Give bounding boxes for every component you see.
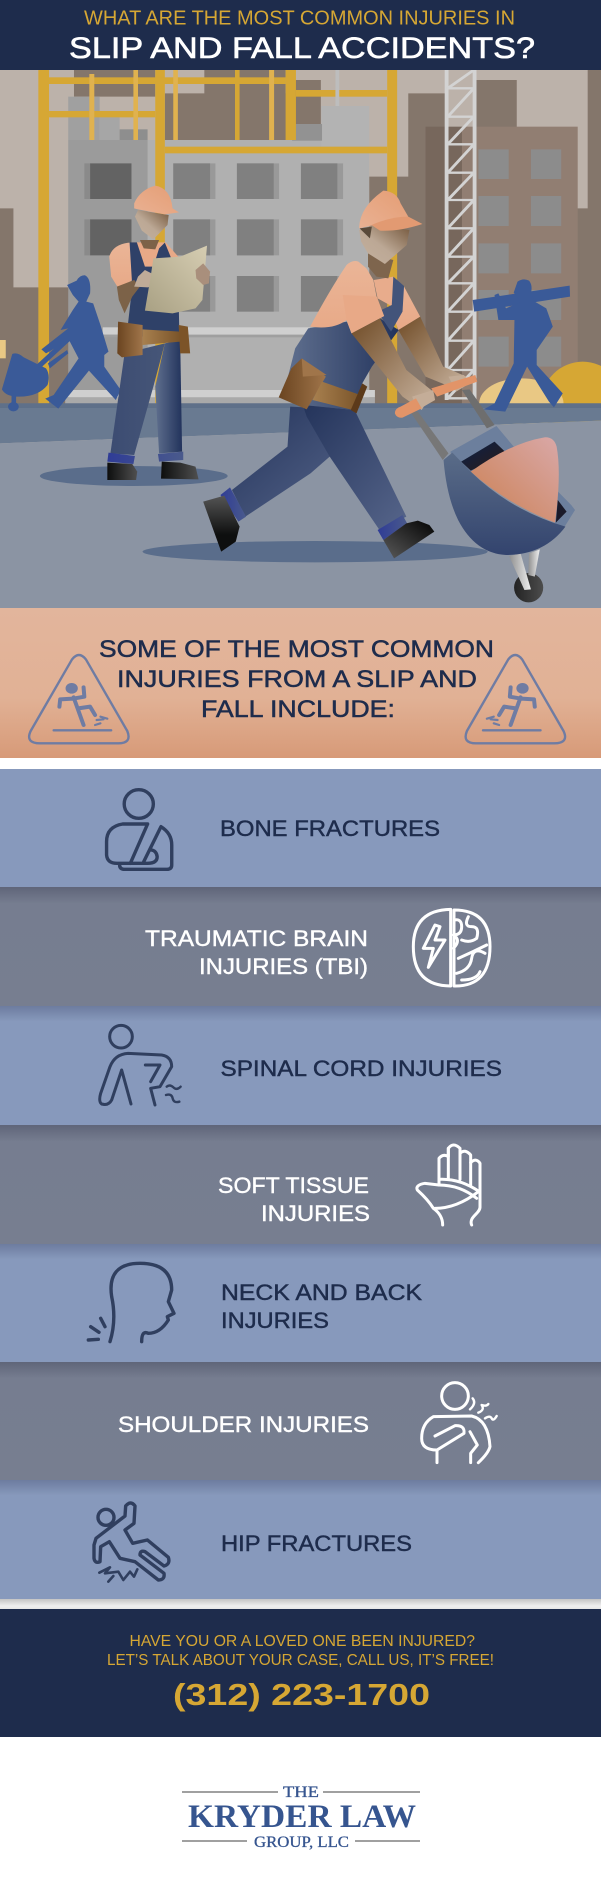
icon: person falling on hip <box>94 1503 169 1582</box>
label: INJURIES <box>221 1308 329 1333</box>
ground <box>0 403 601 610</box>
crane tower <box>337 70 475 400</box>
blue walker with wheelbarrow <box>2 275 121 411</box>
panel: shoulder injuries <box>0 1362 601 1480</box>
panel: traumatic brain injuries <box>0 887 601 1006</box>
blue worker carrying beam <box>473 279 570 412</box>
icon: hand <box>417 1145 480 1225</box>
label: SPINAL CORD INJURIES <box>220 1056 502 1081</box>
panel: neck and back injuries <box>0 1244 601 1362</box>
icon: wet floor sign right <box>466 655 565 743</box>
label: SOFT TISSUE <box>218 1173 369 1198</box>
shadow <box>143 541 488 562</box>
heading line 1: WHAT ARE THE MOST COMMON INJURIES IN <box>84 8 515 30</box>
logo: The Kryder Law Group: GROUP, LLC <box>254 1834 349 1851</box>
label: HIP FRACTURES <box>221 1531 412 1556</box>
call to action text: HAVE YOU OR A LOVED ONE BEEN INJURED? <box>130 1633 475 1650</box>
logo: The Kryder Law Group <box>182 1784 420 1851</box>
label: TRAUMATIC BRAIN <box>145 926 368 951</box>
label: NECK AND BACK <box>221 1280 422 1305</box>
sand piles <box>0 340 601 424</box>
call to action text: LET’S TALK ABOUT YOUR CASE, CALL US, IT’S FREE! <box>107 1652 494 1669</box>
divider strip <box>0 1599 601 1609</box>
standing worker <box>40 186 228 486</box>
yellow scaffolding <box>38 70 397 403</box>
panel: spinal cord injuries <box>0 1006 601 1125</box>
intro text: INJURIES FROM A SLIP AND <box>117 666 477 693</box>
label <box>218 1173 370 1226</box>
label: INJURIES <box>261 1201 370 1226</box>
label: INJURIES (TBI) <box>199 954 368 979</box>
icon: shoulder pain <box>422 1383 497 1463</box>
gray building under construction <box>65 97 375 404</box>
panel: soft tissue injuries <box>0 1125 601 1244</box>
walking worker with wheelbarrow <box>143 191 575 602</box>
label: BONE FRACTURES <box>220 816 440 841</box>
intro text: SOME OF THE MOST COMMON <box>99 636 494 663</box>
header bar <box>0 0 601 70</box>
sky and distant buildings <box>0 70 601 444</box>
label <box>145 926 368 979</box>
heading line 2: SLIP AND FALL ACCIDENTS? <box>69 32 535 65</box>
icon: head and neck profile <box>88 1263 174 1342</box>
icon: brain with lightning bolt <box>413 909 490 986</box>
panel: call to action <box>0 1609 601 1737</box>
illustration: construction site <box>0 70 601 610</box>
label <box>221 1280 422 1333</box>
intro text: FALL INCLUDE: <box>201 696 395 723</box>
label: SHOULDER INJURIES <box>118 1412 369 1437</box>
icon: wet floor sign left <box>29 655 129 743</box>
phone number: (312) 223-1700 <box>173 1677 430 1712</box>
logo: The Kryder Law Group: THE <box>283 1784 319 1801</box>
intro text <box>99 636 494 723</box>
call to action text <box>107 1633 494 1669</box>
shadow <box>40 466 228 486</box>
logo: The Kryder Law Group: KRYDER LAW <box>188 1799 416 1835</box>
wheelbarrow <box>410 389 575 602</box>
panel: intro band <box>0 608 601 758</box>
panel: hip fractures <box>0 1480 601 1599</box>
panel: bone fractures <box>0 769 601 887</box>
icon: wet floor signs <box>29 655 565 743</box>
icon: person with back pain <box>100 1025 181 1105</box>
icon: arm in sling <box>107 790 172 869</box>
